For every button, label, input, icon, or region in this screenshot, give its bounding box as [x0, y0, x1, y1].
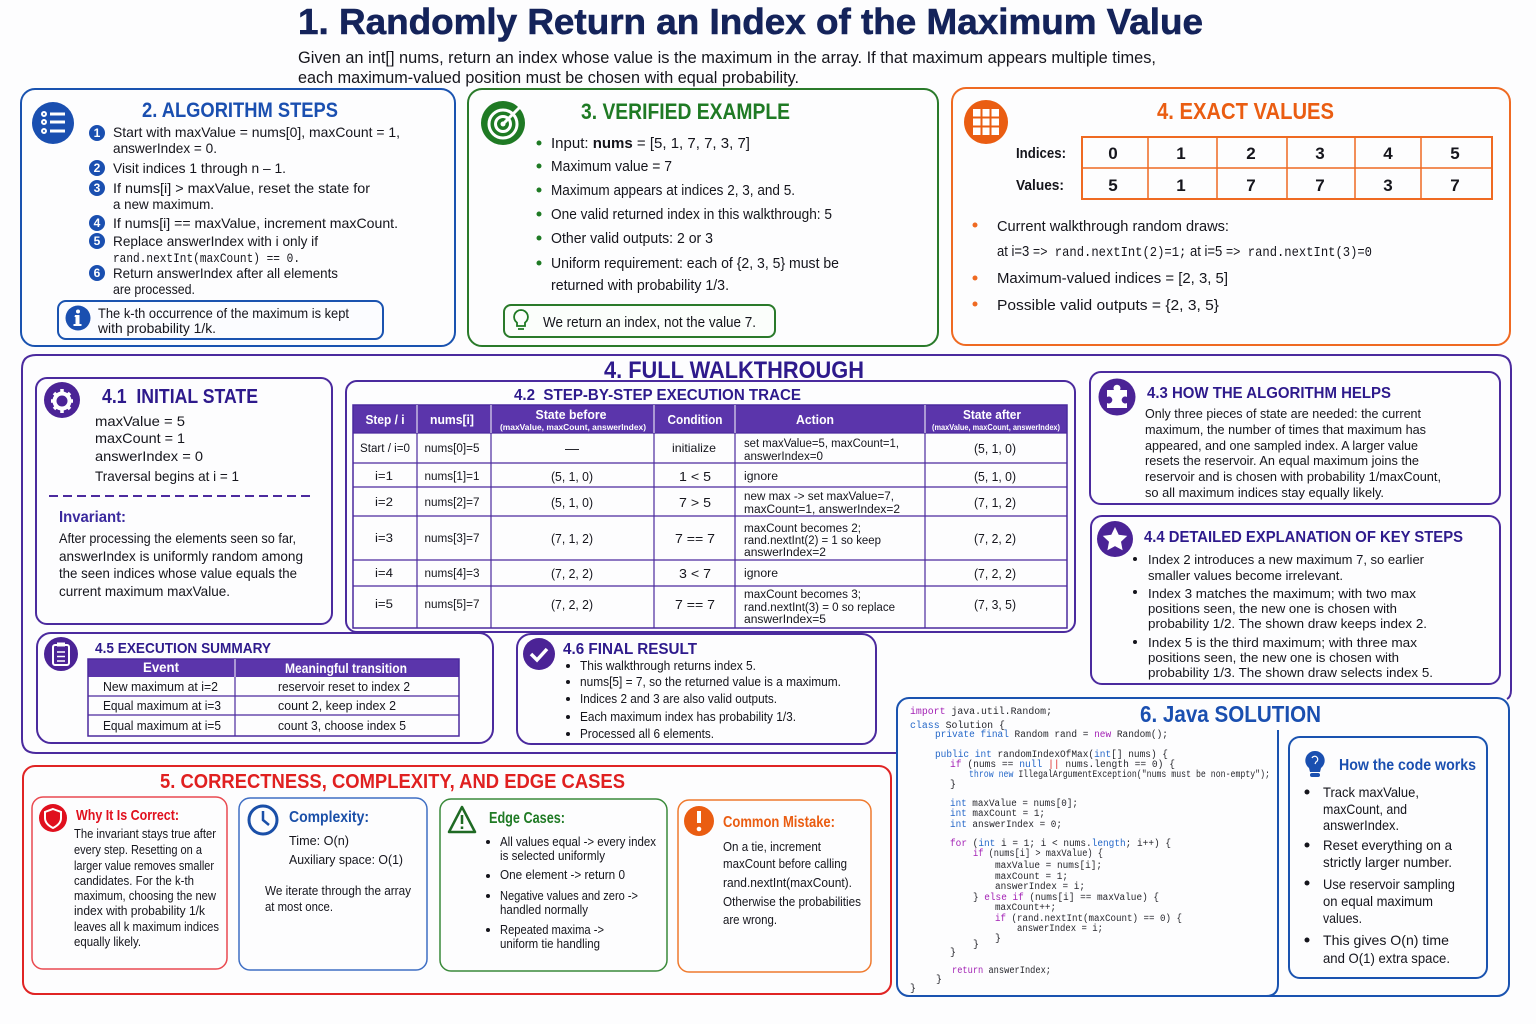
- panel: detailed explanation: [1091, 516, 1500, 684]
- steps text: are processed.: [113, 281, 195, 297]
- callout: index not value: [504, 305, 775, 337]
- callout: keep probability: with probability 1/k.: [97, 320, 216, 336]
- icon: clipboard: [44, 637, 78, 671]
- text: why correct: larger value removes smaller: [74, 859, 214, 873]
- text: edge cases: Repeated maxima ->: [500, 923, 604, 937]
- heading: verified example: 3. VERIFIED EXAMPLE: [581, 99, 790, 124]
- text: complexity: Time: O(n): [289, 833, 349, 848]
- explanation text: [1148, 552, 1433, 680]
- code block: for (int i = 1; i < nums.length; i++) {: [950, 838, 1171, 850]
- example text: Maximum value = 7: [551, 158, 672, 175]
- values text: Current walkthrough random draws:: [997, 218, 1229, 235]
- card: how the code works: [1289, 737, 1487, 978]
- table rows: (5, 1, 0): [974, 441, 1016, 456]
- result text: Each maximum index has probability 1/3.: [580, 710, 796, 724]
- steps text: Replace answerIndex with i only if: [113, 233, 318, 249]
- example text: Input: nums = [5, 1, 7, 7, 3, 7]: [551, 135, 750, 152]
- array table: 2: [1246, 144, 1256, 163]
- heading: execution trace: 4.2 STEP-BY-STEP EXECUTION TRACE: [514, 387, 801, 404]
- table header: Step / i: [366, 412, 404, 427]
- panel: execution trace: [346, 381, 1075, 632]
- table rows: i=5: [375, 599, 393, 611]
- table rows: i=2: [375, 497, 393, 509]
- step numbers: 4: [94, 216, 101, 230]
- text: complexity: We iterate through the array: [265, 884, 412, 898]
- heading: final result: 4.6 FINAL RESULT: [563, 641, 697, 658]
- explanation text: positions seen, the new one is chosen with: [1148, 601, 1397, 616]
- invariant: current maximum maxValue.: [59, 583, 230, 599]
- heading: execution summary: 4.5 EXECUTION SUMMARY: [95, 640, 271, 657]
- problem statement: [298, 48, 1156, 87]
- code block: } else if (nums[i] == maxValue) {: [973, 892, 1159, 904]
- bullets: [536, 140, 542, 266]
- table rows: nums[2]=7: [424, 497, 480, 509]
- explanation text: maximum, the number of times that maximum has: [1145, 422, 1426, 437]
- problem statement: Given an int[] nums, return an index whose value is the maximum in the array. If that maximum appears multiple times,: [298, 48, 1156, 67]
- text: edge cases: One element -> return 0: [500, 868, 625, 882]
- heading: exact values: 4. EXACT VALUES: [1157, 98, 1334, 124]
- steps text: a new maximum.: [113, 196, 214, 212]
- explanation text: Index 2 introduces a new maximum 7, so earlier: [1148, 552, 1425, 567]
- code block: maxCount = 1;: [995, 872, 1068, 883]
- example text: returned with probability 1/3.: [551, 277, 729, 294]
- table rows: —: [565, 440, 579, 456]
- steps text: Start with maxValue = nums[0], maxCount = 1,: [113, 124, 400, 140]
- icon: list: [32, 102, 74, 144]
- text: edge cases: Negative values and zero ->: [500, 889, 638, 903]
- code block: }: [950, 779, 956, 791]
- table rows: nums[4]=3: [424, 568, 480, 580]
- array table: 7: [1450, 176, 1460, 195]
- state values: answerIndex = 0: [95, 448, 203, 464]
- invariant: [59, 509, 303, 599]
- text: how the code works: answerIndex.: [1323, 817, 1399, 833]
- explanation text: reservoir and is chosen with probability 1/maxCount,: [1145, 469, 1441, 484]
- panel: full walkthrough: [22, 355, 1511, 753]
- summary table: [88, 659, 459, 736]
- text: complexity: at most once.: [265, 900, 333, 914]
- callout: keep probability: [58, 301, 383, 339]
- table rows: i=3: [375, 533, 393, 545]
- explanation text: positions seen, the new one is chosen with: [1148, 650, 1399, 665]
- text: common mistake: are wrong.: [723, 913, 777, 927]
- text: how the code works: [1323, 784, 1455, 966]
- icon: puzzle: [1098, 378, 1136, 416]
- steps text: Return answerIndex after all elements: [113, 265, 338, 281]
- code block: }: [973, 939, 979, 951]
- step numbers: 3: [94, 181, 101, 195]
- table rows: [360, 438, 1016, 626]
- heading: detailed explanation: 4.4 DETAILED EXPLANATION OF KEY STEPS: [1144, 529, 1463, 546]
- text: how the code works: and O(1) extra space.: [1323, 950, 1450, 966]
- card: common mistake: [678, 800, 871, 972]
- text: common mistake: On a tie, increment: [723, 840, 821, 854]
- table header: Condition: [668, 412, 723, 427]
- code block: answerIndex = i;: [995, 881, 1085, 893]
- heading: how the code works: How the code works: [1339, 757, 1476, 774]
- array table: [1016, 137, 1492, 199]
- icon: light bulb: [1305, 751, 1325, 777]
- explanation text: appeared, and one sampled index. A larger value: [1145, 438, 1418, 453]
- heading: how the algorithm helps: 4.3 HOW THE ALGORITHM HELPS: [1147, 385, 1391, 402]
- summary table: New maximum at i=2: [103, 680, 218, 694]
- example text: Other valid outputs: 2 or 3: [551, 230, 713, 247]
- code block: class Solution {: [910, 720, 1005, 732]
- table rows: (7, 2, 2): [974, 531, 1016, 546]
- code block: }: [910, 983, 916, 995]
- panel: initial state: [36, 378, 332, 624]
- steps text: answerIndex = 0.: [113, 140, 217, 156]
- array table: 5: [1108, 176, 1118, 195]
- table rows: answerIndex=2: [744, 547, 826, 559]
- text: complexity: Auxiliary space: O(1): [289, 852, 403, 867]
- code block: }: [936, 974, 942, 986]
- icon: exclamation: [684, 806, 714, 836]
- table rows: (5, 1, 0): [974, 469, 1016, 484]
- table rows: (7, 3, 5): [974, 597, 1016, 612]
- array table: Values:: [1016, 177, 1064, 194]
- table rows: (5, 1, 0): [551, 495, 593, 510]
- array table: 4: [1383, 144, 1393, 163]
- bullets: [486, 840, 490, 932]
- result text: Processed all 6 elements.: [580, 727, 714, 741]
- code block: throw new IllegalArgumentException("nums must be non-empty");: [969, 769, 1270, 781]
- card: complexity: [239, 798, 427, 970]
- table rows: new max -> set maxValue=7,: [744, 491, 894, 503]
- heading: why correct: Why It Is Correct:: [76, 807, 179, 824]
- card: why it is correct: [32, 797, 227, 969]
- table rows: 7 == 7: [675, 531, 715, 546]
- table rows: i=4: [375, 568, 394, 580]
- panel: how the algorithm helps: [1090, 372, 1500, 504]
- table header: Action: [796, 412, 834, 427]
- steps text: Visit indices 1 through n – 1.: [113, 160, 286, 176]
- table rows: (7, 1, 2): [551, 531, 593, 546]
- panel: final result: [517, 634, 876, 744]
- heading: correctness: 5. CORRECTNESS, COMPLEXITY, AND EDGE CASES: [160, 771, 625, 793]
- table rows: nums[1]=1: [424, 471, 480, 483]
- icon: shield: [39, 804, 67, 832]
- text: how the code works: Track maxValue,: [1323, 784, 1419, 800]
- values text: Possible valid outputs = {2, 3, 5}: [997, 297, 1219, 314]
- text: why correct: maximum, choosing the new: [74, 889, 217, 903]
- summary table: reservoir reset to index 2: [278, 680, 410, 694]
- bullets: [1133, 557, 1137, 644]
- table header: (maxValue, maxCount, answerIndex): [500, 423, 646, 432]
- table header: State after: [963, 407, 1021, 422]
- array table: 7: [1246, 176, 1256, 195]
- state values: [95, 413, 239, 484]
- heading: java solution: 6. Java SOLUTION: [1140, 701, 1321, 727]
- array table: 0: [1108, 144, 1118, 163]
- text: edge cases: is selected uniformly: [500, 849, 606, 863]
- code block: [910, 706, 1270, 995]
- code block: if (nums[i] > maxValue) {: [973, 848, 1103, 860]
- array table: 3: [1315, 144, 1325, 163]
- code block: if (nums == null || nums.length == 0) {: [950, 759, 1175, 771]
- bullets: [1304, 790, 1310, 942]
- panel: exact values: [952, 88, 1510, 345]
- array table: 1: [1176, 144, 1186, 163]
- steps text: If nums[i] == maxValue, increment maxCount.: [113, 215, 398, 231]
- table rows: nums[5]=7: [424, 599, 480, 611]
- code block: maxCount++;: [995, 903, 1056, 914]
- panel: execution summary: [37, 633, 493, 743]
- values text: Maximum-valued indices = [2, 3, 5]: [997, 270, 1228, 287]
- text: how the code works: Use reservoir sampling: [1323, 876, 1455, 892]
- table rows: answerIndex=0: [744, 451, 823, 463]
- steps text: [113, 124, 400, 297]
- example text: One valid returned index in this walkthrough: 5: [551, 206, 832, 223]
- code block: import java.util.Random;: [910, 706, 1052, 718]
- callout: keep probability: The k-th occurrence of the maximum is kept: [98, 305, 349, 321]
- table header: (maxValue, maxCount, answerIndex): [932, 423, 1060, 432]
- bullets: [972, 222, 978, 306]
- text: common mistake: [723, 840, 861, 927]
- table rows: (7, 2, 2): [974, 566, 1016, 581]
- text: how the code works: This gives O(n) time: [1323, 932, 1449, 948]
- table rows: nums[0]=5: [424, 443, 480, 455]
- panel: correctness complexity edge cases: [23, 766, 891, 994]
- panel: verified example: [468, 89, 938, 346]
- table header: nums[i]: [430, 412, 474, 427]
- text: why correct: [74, 827, 219, 949]
- text: common mistake: rand.nextInt(maxCount).: [723, 876, 852, 890]
- invariant: the seen indices whose value equals the: [59, 565, 297, 581]
- example text: Maximum appears at indices 2, 3, and 5.: [551, 182, 795, 199]
- table rows: answerIndex=5: [744, 614, 826, 626]
- table header: State before: [536, 407, 606, 422]
- table rows: 1 < 5: [679, 469, 711, 484]
- text: common mistake: maxCount before calling: [723, 857, 847, 871]
- invariant: answerIndex is uniformly random among: [59, 548, 303, 564]
- table rows: (7, 1, 2): [974, 495, 1016, 510]
- text: common mistake: Otherwise the probabilities: [723, 895, 861, 909]
- panel: algorithm steps: [21, 89, 455, 346]
- table rows: maxCount becomes 3;: [744, 589, 861, 601]
- code block: answerIndex = i;: [1017, 923, 1103, 935]
- text: edge cases: handled normally: [500, 903, 589, 917]
- array table: 5: [1450, 144, 1460, 163]
- text: why correct: The invariant stays true after: [74, 827, 216, 841]
- heading: initial state: 4.1 INITIAL STATE: [102, 386, 258, 408]
- problem statement: each maximum-valued position must be chosen with equal probability.: [298, 68, 799, 87]
- code block: private final Random rand = new Random();: [935, 729, 1168, 741]
- steps text: If nums[i] > maxValue, reset the state for: [113, 180, 370, 196]
- array table: 1: [1176, 176, 1186, 195]
- summary table: Equal maximum at i=5: [103, 719, 221, 733]
- icon: clock: [249, 806, 277, 834]
- text: why correct: candidates. For the k-th: [74, 874, 194, 888]
- result text: [580, 659, 841, 741]
- table rows: (5, 1, 0): [551, 469, 593, 484]
- table rows: Start / i=0: [360, 443, 410, 455]
- state values: Traversal begins at i = 1: [95, 468, 239, 484]
- explanation text: so all maximum indices stay equally likely.: [1145, 485, 1384, 500]
- table rows: 7 > 5: [679, 495, 711, 510]
- panel: java solution: [897, 698, 1509, 996]
- text: how the code works: Reset everything on a: [1323, 837, 1452, 853]
- table rows: maxCount=1, answerIndex=2: [744, 504, 900, 516]
- state values: maxCount = 1: [95, 430, 185, 446]
- summary table: count 3, choose index 5: [278, 719, 406, 733]
- step numbers: 5: [94, 234, 101, 248]
- explanation text: probability 1/2. The shown draw keeps index 2.: [1148, 616, 1427, 631]
- invariant: Invariant:: [59, 509, 126, 526]
- icon: check: [523, 638, 555, 670]
- table rows: maxCount becomes 2;: [744, 523, 861, 535]
- values text: at i=3 => rand.nextInt(2)=1; at i=5 => rand.nextInt(3)=0: [997, 243, 1372, 261]
- table rows: (7, 2, 2): [551, 597, 593, 612]
- explanation text: Only three pieces of state are needed: the current: [1145, 406, 1421, 421]
- step numbers: 2: [94, 161, 101, 175]
- invariant: After processing the elements seen so far,: [59, 530, 296, 546]
- result text: Indices 2 and 3 are also valid outputs.: [580, 692, 777, 706]
- summary table: count 2, keep index 2: [278, 699, 396, 713]
- text: edge cases: [500, 835, 657, 951]
- steps text: rand.nextInt(maxCount) == 0.: [113, 251, 300, 266]
- values text: [997, 218, 1372, 314]
- array table: 7: [1315, 176, 1325, 195]
- table rows: rand.nextInt(3) = 0 so replace: [744, 602, 895, 614]
- text: edge cases: All values equal -> every index: [500, 835, 657, 849]
- step numbers: 6: [94, 266, 101, 280]
- icon: warning triangle: [449, 807, 475, 832]
- code block: maxValue = nums[i];: [995, 860, 1102, 872]
- example text: [551, 135, 839, 294]
- table rows: 3 < 7: [679, 566, 711, 581]
- result text: This walkthrough returns index 5.: [580, 659, 756, 673]
- icon: star: [1097, 521, 1133, 557]
- state values: maxValue = 5: [95, 413, 185, 429]
- text: why correct: every step. Resetting on a: [74, 843, 202, 857]
- explanation text: smaller values become irrelevant.: [1148, 568, 1343, 583]
- step numbers: [89, 125, 105, 281]
- code block: }: [950, 947, 956, 959]
- table rows: initialize: [672, 441, 716, 455]
- table rows: ignore: [744, 568, 778, 580]
- explanation text: Index 3 matches the maximum; with two max: [1148, 586, 1417, 601]
- summary table: Meaningful transition: [285, 661, 407, 676]
- table rows: (7, 2, 2): [551, 566, 593, 581]
- code block: int answerIndex = 0;: [950, 819, 1062, 831]
- trace table: [353, 405, 1067, 628]
- explanation text: probability 1/3. The shown draw selects index 5.: [1148, 665, 1433, 680]
- icon: target: [481, 101, 525, 145]
- callout: index not value: We return an index, not the value 7.: [543, 314, 756, 331]
- heading: edge cases: Edge Cases:: [489, 810, 565, 827]
- summary table: Event: [143, 660, 179, 675]
- icon: grid: [964, 100, 1008, 144]
- code block: if (rand.nextInt(maxCount) == 0) {: [995, 913, 1182, 925]
- text: why correct: leaves all k maximum indices: [74, 920, 219, 934]
- text: how the code works: strictly larger number.: [1323, 854, 1452, 870]
- code block: public int randomIndexOfMax(int[] nums) {: [935, 749, 1168, 761]
- table rows: ignore: [744, 471, 778, 483]
- summary table: Equal maximum at i=3: [103, 699, 221, 713]
- text: why correct: index with probability 1/k: [74, 904, 206, 918]
- result text: nums[5] = 7, so the returned value is a maximum.: [580, 675, 841, 689]
- text: how the code works: maxCount, and: [1323, 801, 1407, 817]
- heading: algorithm steps: 2. ALGORITHM STEPS: [142, 99, 338, 122]
- table header: [366, 407, 1060, 432]
- array table: 3: [1383, 176, 1393, 195]
- heading: full walkthrough: 4. FULL WALKTHROUGH: [604, 357, 864, 384]
- explanation text: Index 5 is the third maximum; with three max: [1148, 635, 1418, 650]
- bullets: [566, 664, 570, 736]
- table rows: i=1: [375, 471, 393, 483]
- text: edge cases: uniform tie handling: [500, 937, 600, 951]
- table rows: nums[3]=7: [424, 533, 480, 545]
- icon: gear: [44, 382, 80, 418]
- text: how the code works: on equal maximum: [1323, 893, 1433, 909]
- table rows: 7 == 7: [675, 597, 715, 612]
- text: why correct: equally likely.: [74, 935, 141, 949]
- text: how the code works: values.: [1323, 910, 1362, 926]
- code block: return answerIndex;: [952, 965, 1051, 977]
- step numbers: 1: [94, 126, 101, 140]
- title: 1. Randomly Return an Index of the Maximum Value: [298, 1, 1203, 42]
- card: edge cases: [440, 799, 667, 971]
- table rows: set maxValue=5, maxCount=1,: [744, 438, 899, 450]
- explanation text: resets the reservoir. An equal maximum joins the: [1145, 453, 1419, 468]
- heading: complexity: Complexity:: [289, 809, 369, 826]
- explanation text: [1145, 406, 1441, 500]
- code block: }: [995, 933, 1001, 945]
- code block: int maxCount = 1;: [950, 808, 1045, 820]
- text: complexity: [265, 833, 412, 914]
- array table: Indices:: [1016, 145, 1066, 162]
- code block: int maxValue = nums[0];: [950, 798, 1078, 810]
- table rows: rand.nextInt(2) = 1 so keep: [744, 535, 881, 547]
- example text: Uniform requirement: each of {2, 3, 5} must be: [551, 255, 839, 272]
- heading: common mistake: Common Mistake:: [723, 814, 835, 831]
